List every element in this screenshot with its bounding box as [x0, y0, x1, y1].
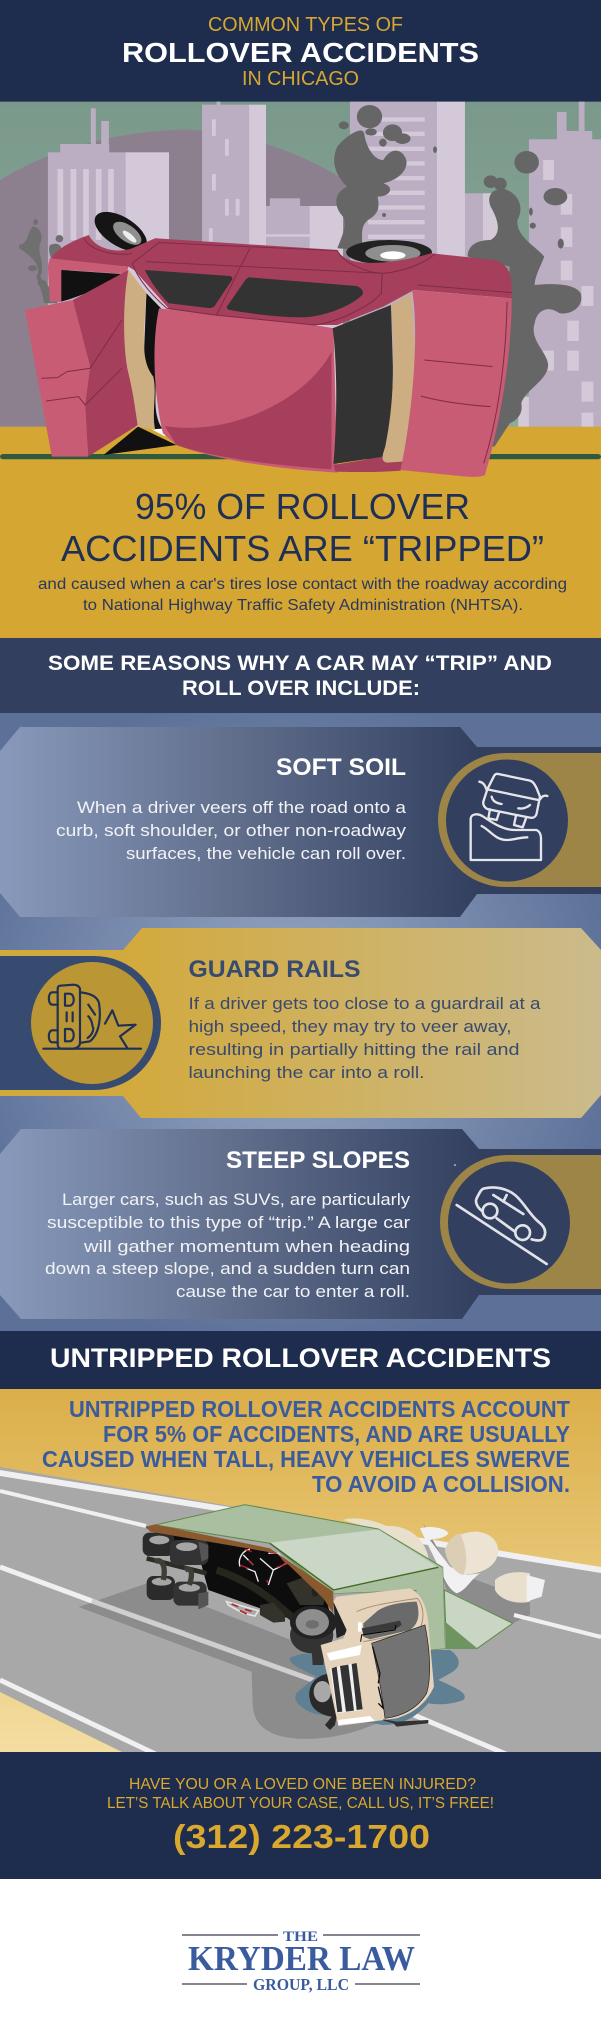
text: untripped rollover explanation: FOR 5% OF ACCIDENTS, AND ARE USUALLY — [103, 1421, 570, 1447]
header banner — [0, 0, 601, 102]
overturned car — [25, 204, 512, 477]
illustration: overturned red car in city — [0, 102, 601, 477]
text: guard rails: If a driver gets too close to a guardrail at a — [188, 994, 541, 1013]
text: untripped rollover explanation: TO AVOID A COLLISION. — [312, 1471, 570, 1497]
text: untripped rollover explanation — [42, 1396, 570, 1497]
text: soft soil: When a driver veers off the road onto a — [77, 798, 407, 817]
icon: car on steep slope — [457, 1187, 547, 1264]
call to action banner: LET’S TALK ABOUT YOUR CASE, CALL US, IT’S FREE! — [107, 1795, 494, 1812]
panel: soft soil — [0, 727, 601, 917]
heading: some reasons — [0, 638, 601, 713]
text: steep slopes: Larger cars, such as SUVs, are particularly — [62, 1190, 411, 1209]
rear wheels — [143, 1533, 208, 1609]
panel: steep slopes — [0, 1129, 601, 1319]
text: steep slopes — [45, 1147, 411, 1301]
text: guard rails: high speed, they may try to veer away, — [188, 1017, 512, 1036]
text: untripped rollover explanation: CAUSED WHEN TALL, HEAVY VEHICLES SWERVE — [42, 1446, 570, 1472]
heading: some reasons: ROLL OVER INCLUDE: — [182, 677, 420, 700]
front axle wheel — [290, 1602, 347, 1665]
text: soft soil: surfaces, the vehicle can roll over. — [126, 844, 406, 863]
heading: untripped rollover accidents — [0, 1331, 601, 1389]
icon: car hitting guard rail — [43, 985, 141, 1049]
logo: The Kryder Law Group, LLC: GROUP, LLC — [253, 1975, 349, 1994]
section: 95% tripped: ACCIDENTS ARE “TRIPPED” — [61, 528, 544, 569]
undercarriage — [145, 1527, 330, 1623]
heading: untripped rollover accidents: UNTRIPPED ROLLOVER ACCIDENTS — [50, 1343, 551, 1373]
text: guard rails: launching the car into a roll. — [188, 1063, 424, 1082]
illustration: overturned truck on road — [0, 1389, 601, 1760]
call to action banner: HAVE YOU OR A LOVED ONE BEEN INJURED? — [129, 1776, 476, 1793]
text: steep slopes: susceptible to this type of “trip.” A large car — [47, 1213, 410, 1232]
road surface — [0, 1467, 601, 1752]
trailer — [146, 1505, 445, 1650]
logo: The Kryder Law Group, LLC — [182, 1929, 420, 1994]
text: steep slopes: will gather momentum when heading — [83, 1237, 410, 1256]
text: steep slopes: down a steep slope, and a sudden turn can — [45, 1259, 410, 1278]
icon: car in soft soil — [471, 774, 547, 860]
blue puddle — [289, 1650, 465, 1725]
left smoke wisp — [19, 219, 69, 303]
spilled cargo — [343, 1518, 545, 1603]
blue background band — [0, 713, 601, 1331]
text: soft soil: SOFT SOIL — [276, 754, 406, 781]
header banner: IN CHICAGO — [242, 68, 359, 90]
logo: The Kryder Law Group, LLC: KRYDER LAW — [188, 1939, 415, 1978]
header banner: ROLLOVER ACCIDENTS — [122, 37, 479, 68]
logo: The Kryder Law Group, LLC: THE — [283, 1929, 318, 1945]
road line — [0, 454, 601, 459]
car wheel top right — [346, 240, 432, 265]
text: untripped rollover explanation: UNTRIPPED ROLLOVER ACCIDENTS ACCOUNT — [69, 1396, 570, 1422]
smoke plumes — [334, 105, 581, 447]
buildings — [48, 102, 601, 427]
call to action banner — [0, 1752, 601, 1879]
truck shadow — [79, 1523, 530, 1739]
heading: some reasons: SOME REASONS WHY A CAR MAY “TRIP” AND — [48, 652, 552, 675]
text: soft soil: curb, soft shoulder, or other non-roadway — [56, 821, 407, 840]
text: steep slopes: STEEP SLOPES — [226, 1147, 410, 1174]
truck cab — [309, 1588, 434, 1730]
text: guard rails: resulting in partially hitting the rail and — [188, 1040, 520, 1059]
truck and cargo — [143, 1505, 545, 1730]
call to action banner: (312) 223-1700 — [173, 1818, 430, 1855]
text: soft soil — [56, 754, 407, 863]
header banner: COMMON TYPES OF — [208, 14, 403, 36]
lane lines — [0, 1491, 601, 1760]
section: 95% tripped — [0, 426, 601, 638]
text: guard rails: GUARD RAILS — [188, 956, 360, 983]
text: steep slopes: cause the car to enter a roll. — [176, 1282, 410, 1301]
section: 95% tripped: and caused when a car's tires lose contact with the roadway according — [38, 576, 567, 593]
panel: guard rails — [0, 928, 601, 1118]
text: guard rails — [188, 956, 541, 1082]
car wheel top left — [87, 204, 155, 259]
green flap — [444, 1590, 513, 1649]
section: 95% tripped: to National Highway Traffic Safety Administration (NHTSA). — [83, 597, 523, 614]
section: 95% tripped: 95% OF ROLLOVER — [135, 486, 470, 527]
